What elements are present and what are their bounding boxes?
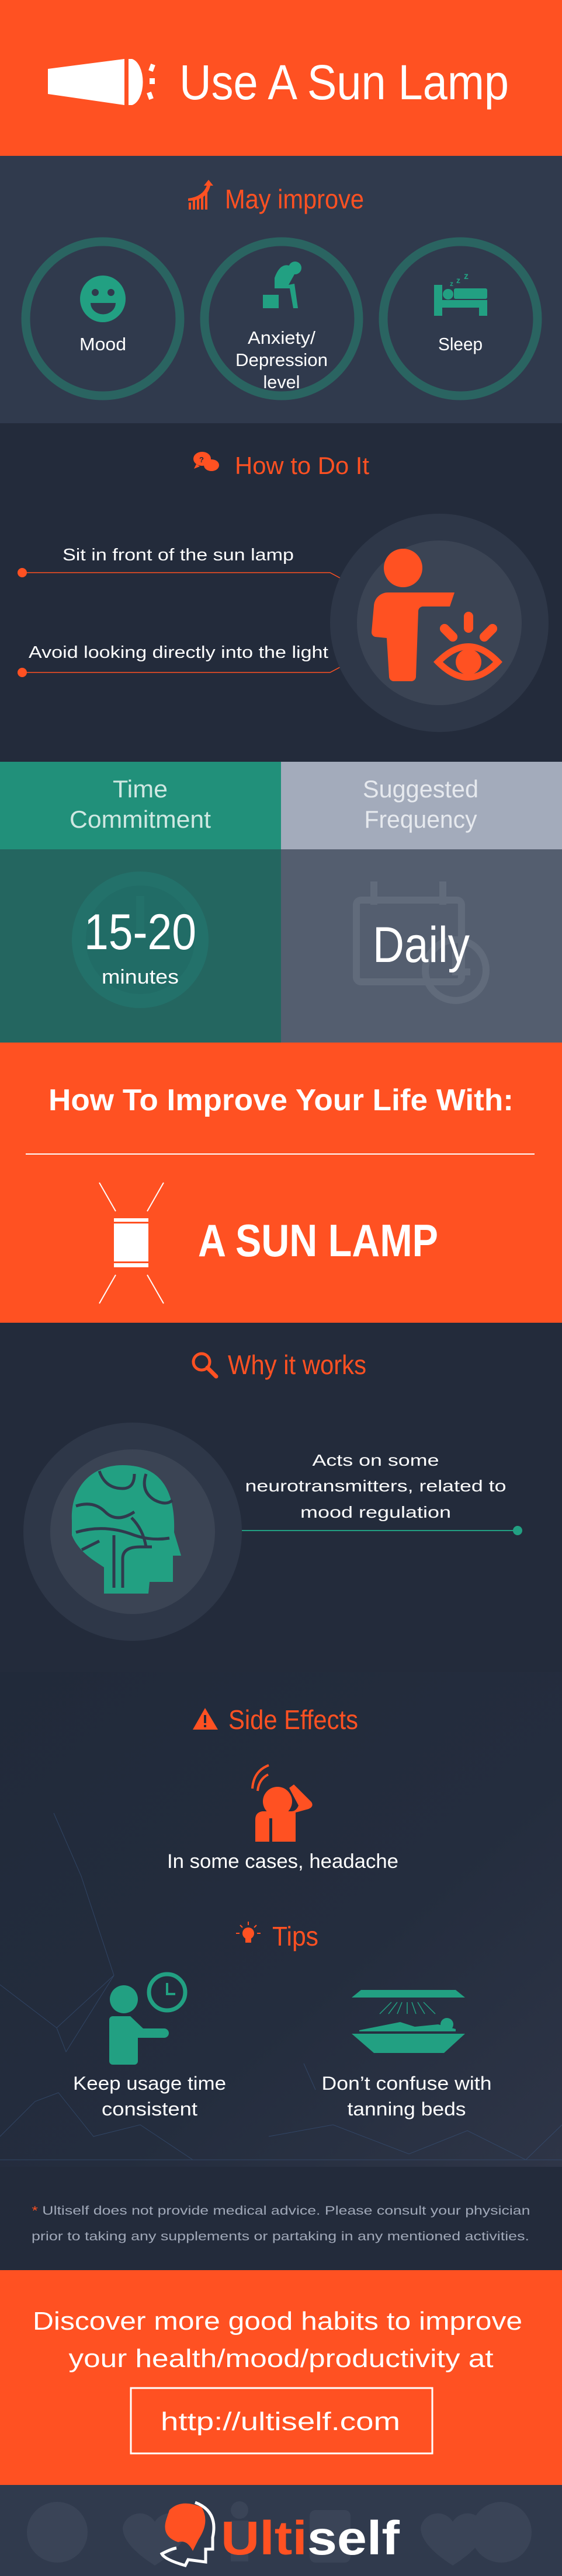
tip: tanning beds: Don’t confuse with bbox=[321, 2073, 492, 2094]
panel: may improve bbox=[0, 156, 562, 423]
disclaimer bbox=[0, 2167, 562, 2270]
heading: side effects: Side Effects bbox=[228, 1704, 358, 1735]
panel: time commitment: 15-20 bbox=[84, 904, 196, 960]
item: anxiety: Anxiety/ bbox=[248, 327, 315, 348]
tip: tanning beds bbox=[321, 1990, 492, 2120]
item: sleep: Sleep bbox=[438, 334, 483, 354]
text: why it works: Acts on some bbox=[312, 1451, 439, 1469]
item: anxiety: Depression bbox=[235, 350, 328, 370]
panel: time commitment: Commitment bbox=[70, 806, 211, 833]
heading: why it works: Why it works bbox=[228, 1350, 366, 1380]
icon: headache person bbox=[252, 1765, 313, 1842]
heading: tips: Tips bbox=[272, 1921, 318, 1951]
panel: why it works bbox=[0, 1323, 562, 1672]
header panel bbox=[0, 0, 562, 156]
heading: how to do it: ? bbox=[199, 455, 204, 464]
item: anxiety bbox=[204, 242, 359, 396]
callout: sit in front: Sit in front of the sun lamp bbox=[63, 546, 294, 564]
disclaimer: * Ultiself does not provide medical advice. Please consult your physician bbox=[32, 2204, 530, 2218]
icon: bed: z bbox=[450, 280, 453, 288]
item: mood bbox=[26, 242, 180, 396]
panel: call to action: Discover more good habits to improve bbox=[33, 2307, 522, 2336]
panel: suggested frequency: Suggested bbox=[363, 775, 478, 803]
text: why it works bbox=[242, 1451, 522, 1535]
heading: may improve: May improve bbox=[225, 184, 364, 214]
icon: smiley bbox=[80, 276, 126, 322]
panel: call to action bbox=[0, 2270, 562, 2485]
panel: suggested frequency: Daily bbox=[373, 917, 470, 973]
icon: sun lamp bbox=[99, 1183, 164, 1303]
panel: side effects and tips bbox=[0, 1672, 562, 2167]
panel: call to action: your health/mood/productivity at bbox=[69, 2344, 493, 2373]
panel: time commitment bbox=[0, 762, 281, 1043]
heading: may improve bbox=[188, 180, 364, 214]
callout: avoid looking: Avoid looking directly into the light bbox=[29, 643, 328, 662]
item: anxiety: level bbox=[263, 372, 300, 392]
text: why it works: neurotransmitters, related to bbox=[245, 1477, 506, 1495]
tip: keep usage time consistent bbox=[73, 1974, 226, 2120]
panel: how to improve banner bbox=[0, 1043, 562, 1323]
callout: sit in front bbox=[18, 546, 353, 585]
item: mood: Mood bbox=[79, 334, 126, 354]
url button bbox=[131, 2388, 432, 2453]
text: headache: In some cases, headache bbox=[167, 1850, 398, 1873]
icon: bed: z bbox=[456, 276, 460, 285]
panel: time commitment: Time bbox=[113, 775, 168, 803]
tip: keep usage time consistent: Keep usage time bbox=[73, 2073, 226, 2094]
icon: brain head bbox=[23, 1423, 242, 1641]
tip: keep usage time consistent: consistent bbox=[102, 2099, 197, 2120]
icon: bed: z bbox=[464, 271, 469, 281]
panel: how to do it bbox=[0, 423, 562, 762]
panel: suggested frequency: Frequency bbox=[365, 806, 477, 833]
logo: Ultiself bbox=[221, 2512, 400, 2565]
icon: depressed person bbox=[263, 262, 301, 308]
tip: tanning beds: tanning beds bbox=[347, 2099, 466, 2120]
icon: person pointing with eye bbox=[330, 514, 549, 732]
title: Use A Sun Lamp bbox=[179, 55, 509, 110]
heading: how to improve: How To Improve Your Life With: bbox=[48, 1083, 514, 1117]
icon: faint clock bbox=[72, 872, 209, 1008]
heading: tips bbox=[236, 1921, 318, 1951]
icon: header lamp bbox=[48, 59, 155, 105]
panel: suggested frequency bbox=[281, 762, 562, 1043]
logo bbox=[162, 2502, 400, 2565]
disclaimer: prior to taking any supplements or partaking in any mentioned activities. bbox=[32, 2230, 529, 2243]
icon: bed bbox=[434, 271, 487, 316]
url button: http://ultiself.com bbox=[161, 2407, 400, 2436]
footer bbox=[0, 2485, 562, 2576]
item: sleep bbox=[383, 242, 537, 396]
callout: avoid looking bbox=[18, 643, 358, 677]
heading: how to do it: How to Do It bbox=[235, 452, 369, 479]
text: why it works: mood regulation bbox=[300, 1503, 451, 1521]
icon: faint calendar bbox=[356, 881, 486, 1001]
title: a sun lamp: A SUN LAMP bbox=[198, 1215, 438, 1266]
panel: time commitment: minutes bbox=[102, 966, 179, 988]
